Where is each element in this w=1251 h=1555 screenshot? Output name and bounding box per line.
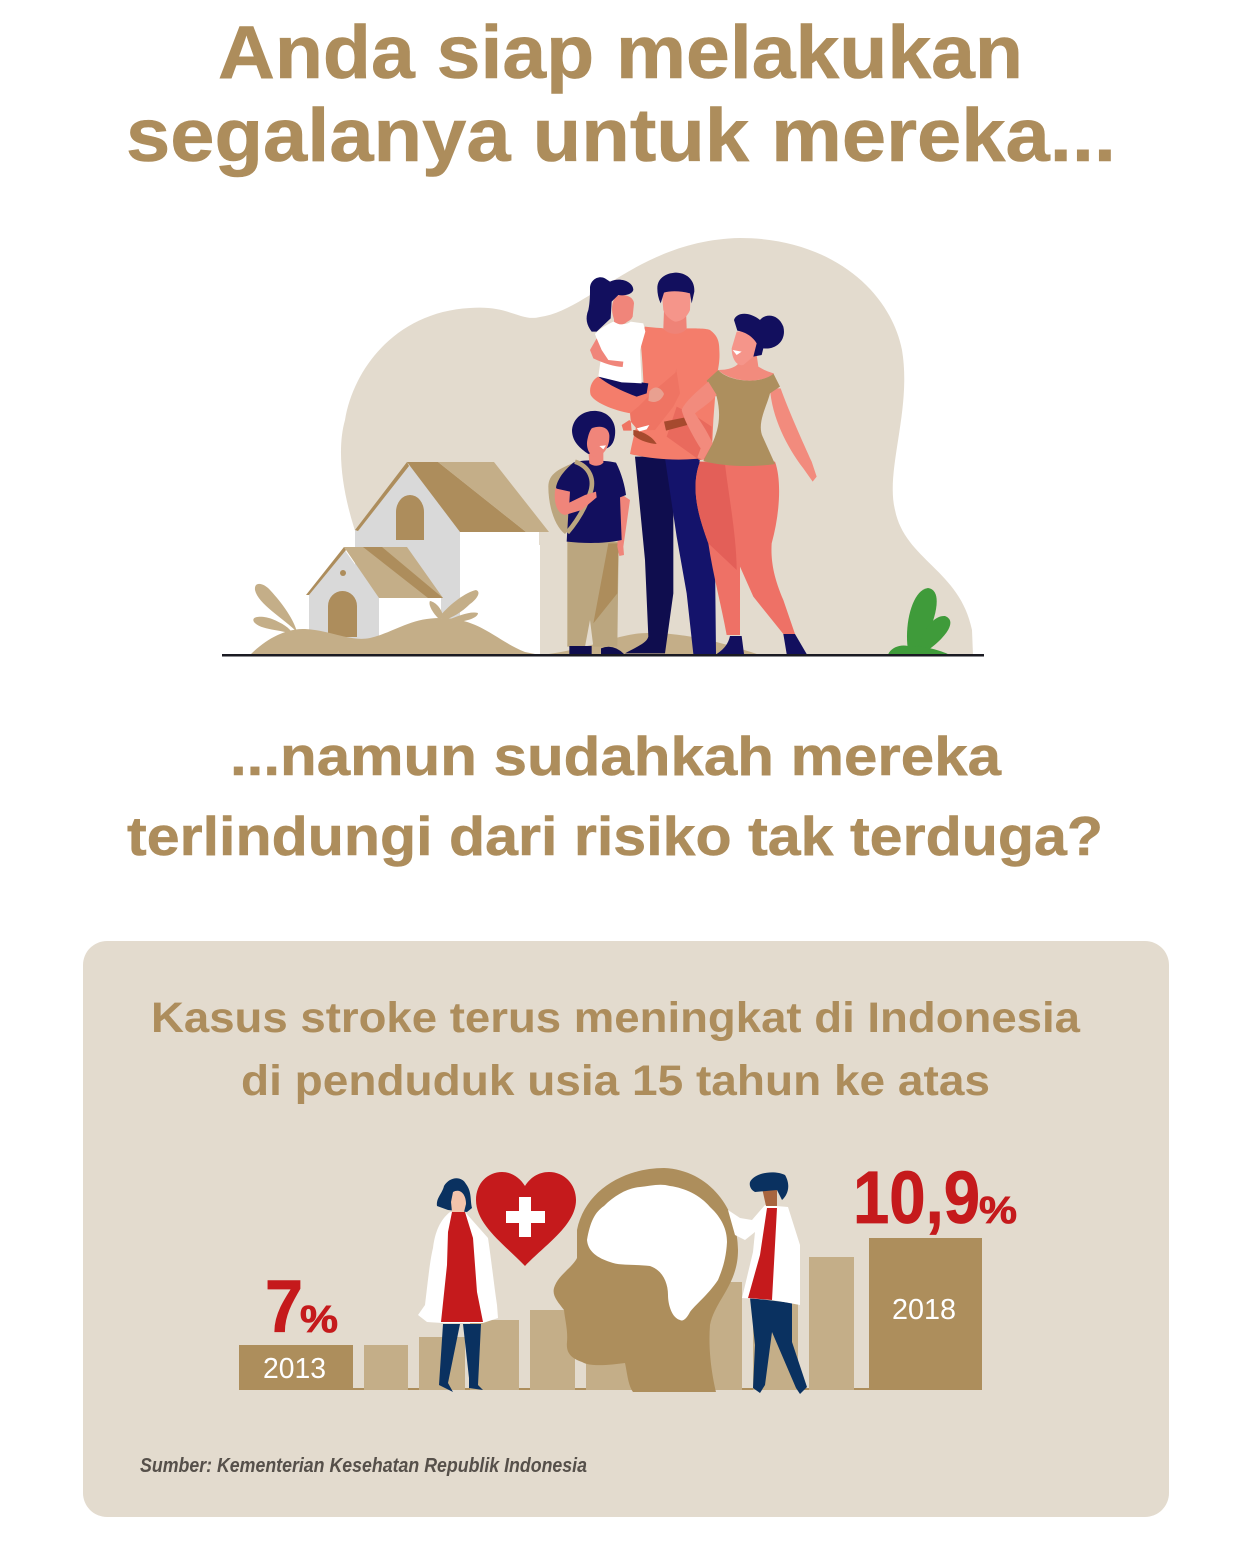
icon: heart with cross [476,1172,576,1266]
woman legs [696,462,807,654]
ground mound left [250,618,540,655]
illustration: family and houses [222,238,984,656]
panel background [83,941,1169,1517]
icon: head with brain [554,1168,738,1392]
woman top [703,370,780,466]
value 7%: % [300,1299,338,1341]
label 2013: 2013 [263,1353,326,1385]
value 7% [265,1265,338,1348]
man arm and girl shins [622,372,687,444]
figure: man doctor [728,1172,807,1394]
label 2018: 2018 [892,1294,956,1326]
subheading: ...namun sudahkah mereka [230,725,1001,787]
panel heading: di penduduk usia 15 tahun ke atas [241,1057,990,1105]
family figures [548,273,817,654]
ground line [222,654,984,656]
man trousers [625,457,716,654]
ground mound behind family [540,633,760,655]
panel heading: Kasus stroke terus meningkat di Indonesia [151,994,1081,1042]
figure: woman doctor [418,1178,498,1392]
bar 2013 [239,1345,353,1390]
boy head [572,411,615,457]
panel: stroke statistics [83,941,1169,1517]
background blob [341,238,973,655]
girl body [590,310,650,414]
subheading: terlindungi dari risiko tak terduga? [127,805,1103,867]
bar 2018 [869,1238,982,1390]
plants: tan leaves [253,584,478,634]
subheading [127,725,1103,867]
title [126,10,1116,177]
man head [657,273,694,334]
small house [306,547,443,640]
man torso [630,327,720,460]
source note: Sumber: Kementerian Kesehatan Republik Indonesia [140,1455,587,1477]
title: segalanya untuk mereka... [126,93,1116,177]
value 10,9%: % [979,1190,1017,1232]
title: Anda siap melakukan [218,10,1023,94]
green plant [888,588,950,655]
boy backpack [548,462,594,534]
panel heading [151,994,1081,1105]
bar chart [239,1238,982,1390]
woman right arm [770,388,817,482]
woman left arm [682,382,717,460]
boy trousers [567,542,624,654]
boy body [555,451,630,556]
value 10,9%: 10,9 [853,1156,980,1239]
big house [355,462,549,655]
value 7%: 7 [265,1265,303,1348]
woman head [718,314,784,381]
girl head [587,277,634,332]
